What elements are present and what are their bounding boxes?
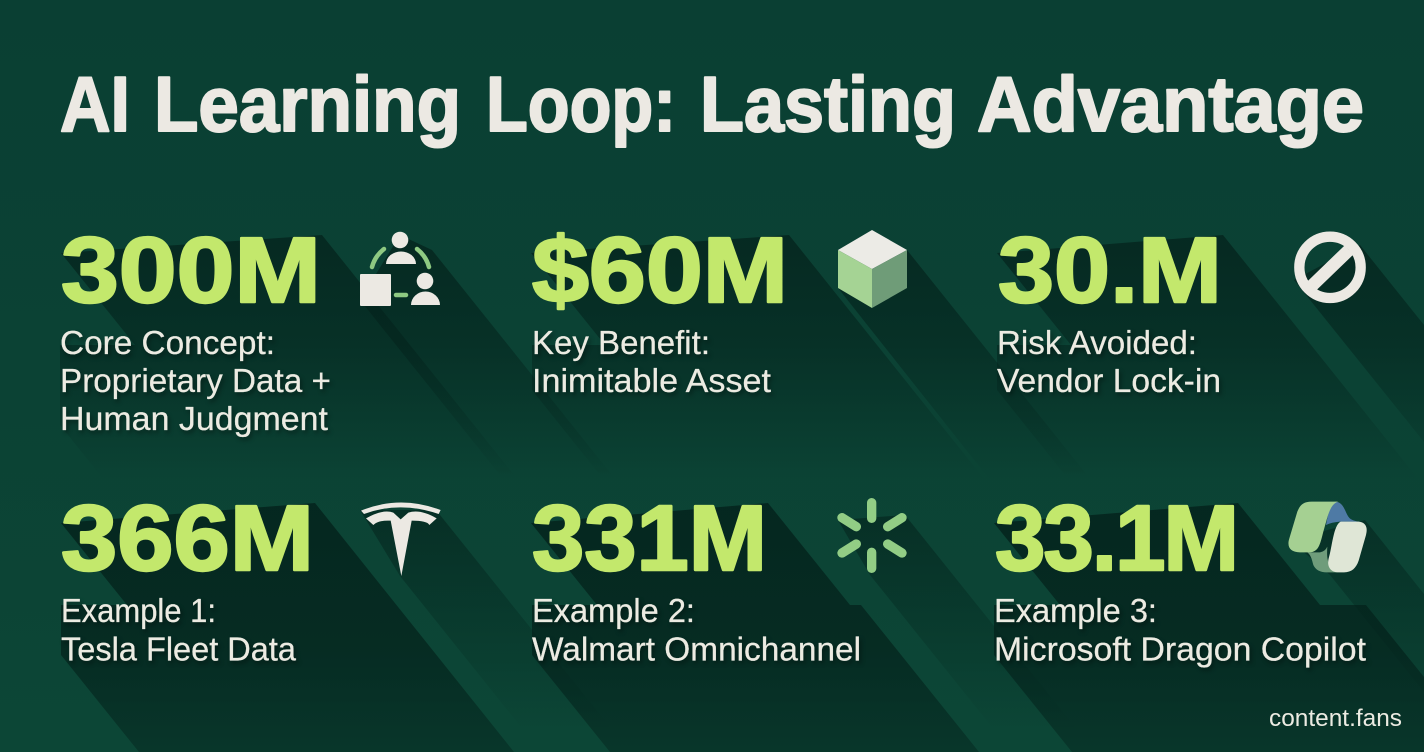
panel: example 1 [61,486,441,668]
panel: key benefit [532,218,907,399]
stat: 366M: 366M [61,486,314,590]
long diagonal shadows [60,235,1424,752]
title [60,60,1364,148]
stat: 33.1M: 33.1M [995,486,1237,590]
panel: example 2 [532,486,902,668]
stat: 300M: 300M [61,218,321,322]
icon: people and data loop [360,232,440,306]
panel: core concept [60,218,440,437]
title: Learning [154,60,461,148]
title: AI [60,60,130,148]
label: risk avoided [997,324,1221,399]
label: key benefit [532,324,771,399]
label: risk avoided: Risk Avoided: [997,324,1197,361]
label: key benefit: Inimitable Asset [532,362,771,399]
icon: tesla logo [361,502,441,576]
label: example 1: Tesla Fleet Data [61,630,297,668]
title: Advantage [977,60,1364,148]
label: example 3: Microsoft Dragon Copilot [994,630,1366,668]
label: core concept: Proprietary Data + [60,362,331,399]
panel: example 3 [994,486,1367,668]
label: example 2: Walmart Omnichannel [532,630,861,668]
label: example 2: Example 2: [532,592,695,629]
icon: cube [838,230,907,308]
panel: risk avoided [997,218,1361,399]
title: Lasting [700,60,956,148]
label: example 3: Example 3: [994,592,1157,629]
label: example 1 [61,592,297,668]
label: example 2 [532,592,861,668]
label: core concept: Human Judgment [60,400,328,437]
icon: copilot logo [1288,502,1367,572]
label: core concept [60,324,331,437]
stat: 30.M: 30.M [998,218,1222,322]
stat: $60M: $60M [532,218,788,322]
icon: prohibited sign [1299,237,1361,298]
label: risk avoided: Vendor Lock-in [997,362,1221,399]
label: core concept: Core Concept: [60,324,275,361]
title: Loop: [486,60,676,148]
icon: walmart spark [842,503,902,568]
label: key benefit: Key Benefit: [532,324,710,361]
stat: 331M: 331M [532,486,767,590]
label: example 1: Example 1: [61,592,216,629]
footer: source credit: content.fans [1269,705,1402,732]
label: example 3 [994,592,1366,668]
